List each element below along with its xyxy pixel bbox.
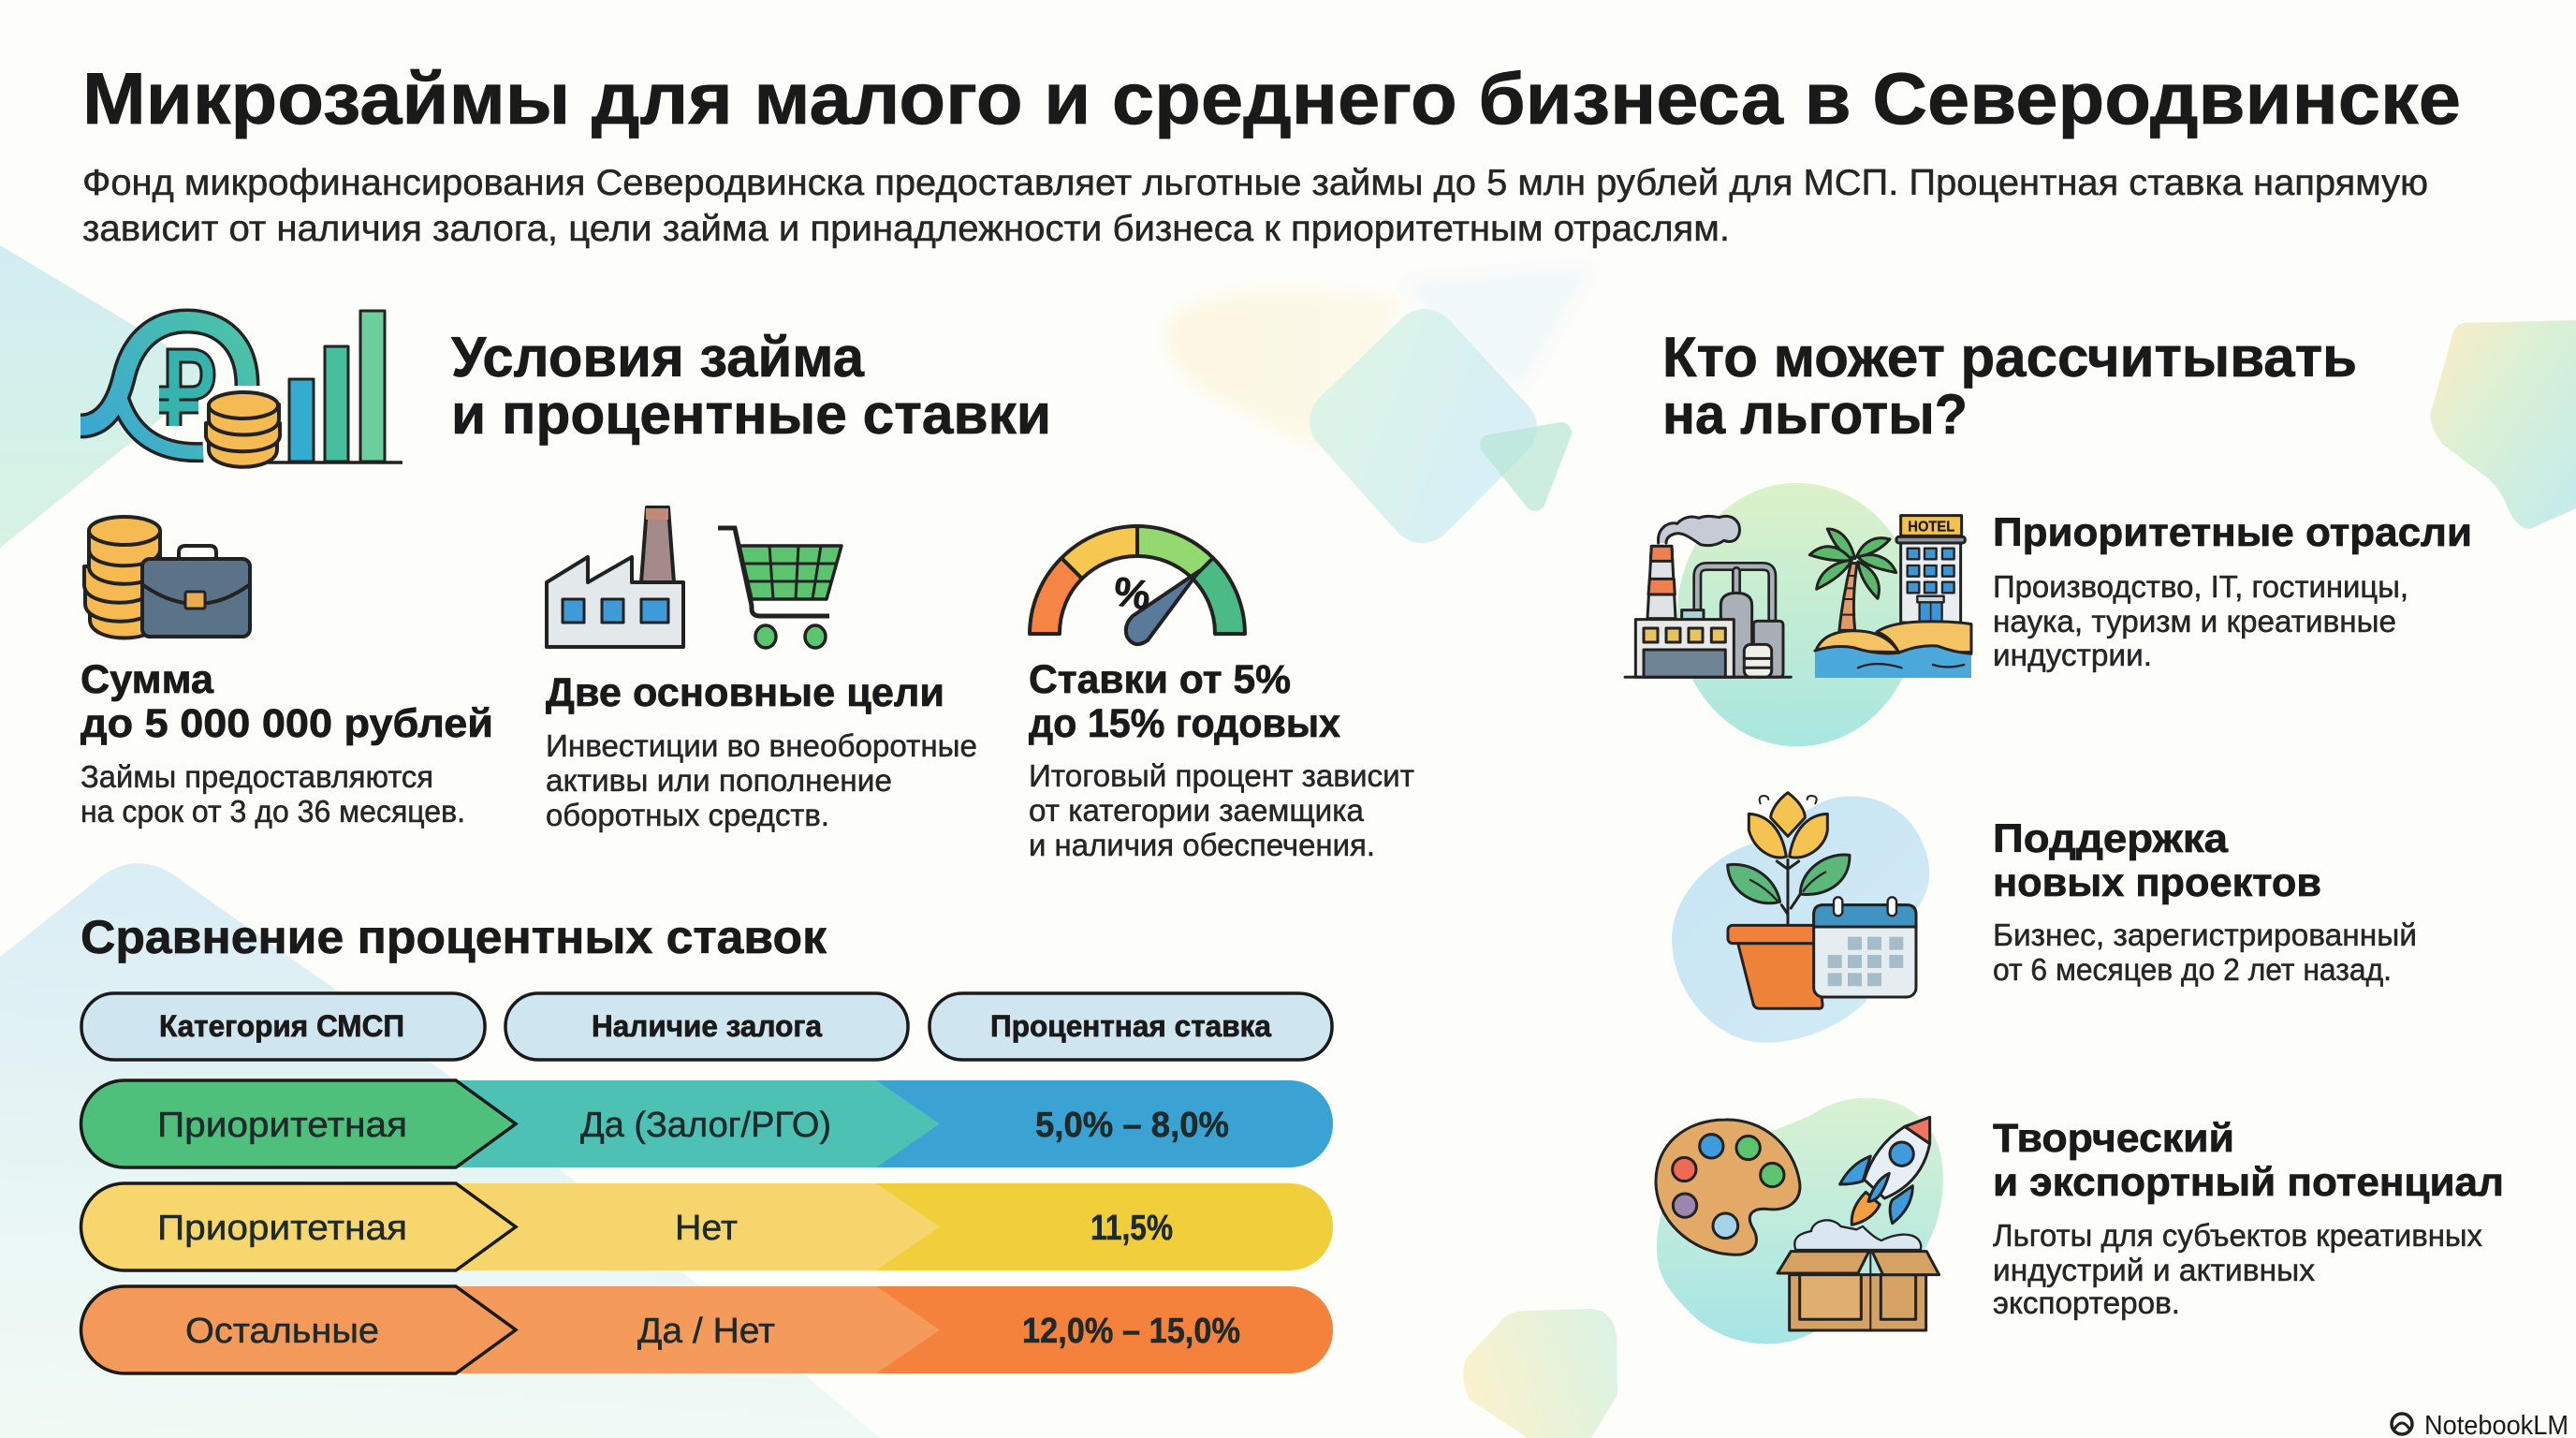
section heading: who qualifies: Кто может рассчитывать (1662, 326, 2357, 389)
panel: new project support: от 6 месяцев до 2 лет назад. (1993, 952, 2392, 987)
icon: rate gauge (1030, 526, 1245, 644)
card: loan amount: Займы предоставляются (80, 759, 433, 794)
card: loan amount: до 5 000 000 рублей (80, 701, 493, 746)
card: two main goals: Инвестиции во внеоборотные (546, 728, 977, 763)
icon: ruble loan and growth bars (80, 311, 402, 467)
row: priority with collateral: 5,0% – 8,0% (1035, 1106, 1229, 1145)
section heading: loan terms: и процентные ставки (451, 383, 1051, 446)
icon: coins and briefcase (84, 517, 250, 638)
card: loan amount: Сумма (80, 657, 214, 702)
panel: new project support: Бизнес, зарегистрированный (1993, 917, 2417, 952)
icon: factory and shopping cart (547, 507, 842, 648)
intro text: зависит от наличия залога, цели займа и принадлежности бизнеса к приоритетным отраслям. (82, 209, 1730, 249)
card: rates: Ставки от 5% (1029, 657, 1291, 702)
panel: new project support (1672, 793, 2417, 1043)
panel: priority industries: Приоритетные отрасли (1993, 510, 2472, 555)
card: two main goals: Две основные цели (546, 670, 944, 715)
icon: factory, palm and hotel (1625, 483, 1971, 746)
section heading: loan terms (451, 326, 1051, 446)
panel: priority industries: Производство, IT, гостиницы, (1993, 569, 2408, 604)
card: rates: до 15% годовых (1029, 701, 1340, 746)
section heading: who qualifies (1662, 326, 2357, 446)
row: priority without collateral: Приоритетная (157, 1209, 407, 1248)
card: rates: и наличия обеспечения. (1029, 828, 1375, 862)
panel: creative and export potential: и экспортный потенциал (1993, 1160, 2504, 1205)
panel: priority industries (1625, 483, 2472, 746)
icon: plant and calendar (1672, 793, 1929, 1043)
intro text (82, 163, 2428, 249)
title: Микрозаймы для малого и среднего бизнеса в Северодвинске (82, 57, 2461, 139)
section heading: who qualifies: на льготы? (1662, 383, 1968, 446)
card: two main goals (546, 507, 977, 832)
row: others: Да / Нет (637, 1312, 775, 1351)
row: priority without collateral (80, 1183, 1333, 1270)
comparison table (80, 993, 1333, 1373)
panel: creative and export potential: Творческий (1993, 1116, 2234, 1161)
card: rates: от категории заемщика (1029, 793, 1365, 828)
table header (81, 993, 1332, 1060)
panel: creative and export potential: Льготы для субъектов креативных (1993, 1218, 2482, 1253)
panel: new project support: новых проектов (1993, 860, 2321, 905)
panel: creative and export potential: экспортеров. (1993, 1285, 2180, 1320)
card: rates (1029, 526, 1414, 862)
row: others (80, 1286, 1333, 1373)
section heading: loan terms: Условия займа (451, 326, 865, 389)
table header: Наличие залога (592, 1009, 822, 1043)
row: others: Остальные (185, 1312, 379, 1351)
table header: Категория СМСП (159, 1009, 404, 1043)
panel: creative and export potential: индустрий и активных (1993, 1253, 2315, 1287)
card: two main goals: оборотных средств. (546, 798, 829, 832)
icon: palette, rocket and box (1656, 1098, 1943, 1343)
panel: new project support: Поддержка (1993, 816, 2229, 861)
panel: creative and export potential (1656, 1098, 2504, 1343)
card: loan amount (80, 517, 493, 829)
row: priority without collateral: 11,5% (1090, 1209, 1173, 1248)
table header: Процентная ставка (990, 1009, 1271, 1043)
icon: factory, palm and hotel: HOTEL (1908, 519, 1954, 535)
row: priority without collateral: Нет (675, 1209, 738, 1248)
card: rates: Итоговый процент зависит (1029, 758, 1414, 793)
icon: rate gauge: % (1111, 568, 1153, 619)
intro text: Фонд микрофинансирования Северодвинска предоставляет льготные займы до 5 млн рублей для МСП. Процентная ставка напрямую (82, 163, 2428, 203)
card: loan amount: на срок от 3 до 36 месяцев. (80, 794, 465, 829)
card: two main goals: активы или пополнение (546, 763, 892, 798)
panel: priority industries: наука, туризм и креативные (1993, 604, 2396, 638)
panel: priority industries: индустрии. (1993, 638, 2152, 672)
row: others: 12,0% – 15,0% (1022, 1312, 1240, 1351)
row: priority with collateral: Приоритетная (157, 1106, 407, 1145)
heading: rate comparison: Сравнение процентных ставок (80, 911, 827, 963)
row: priority with collateral (80, 1080, 1333, 1167)
row: priority with collateral: Да (Залог/РГО) (580, 1106, 831, 1145)
